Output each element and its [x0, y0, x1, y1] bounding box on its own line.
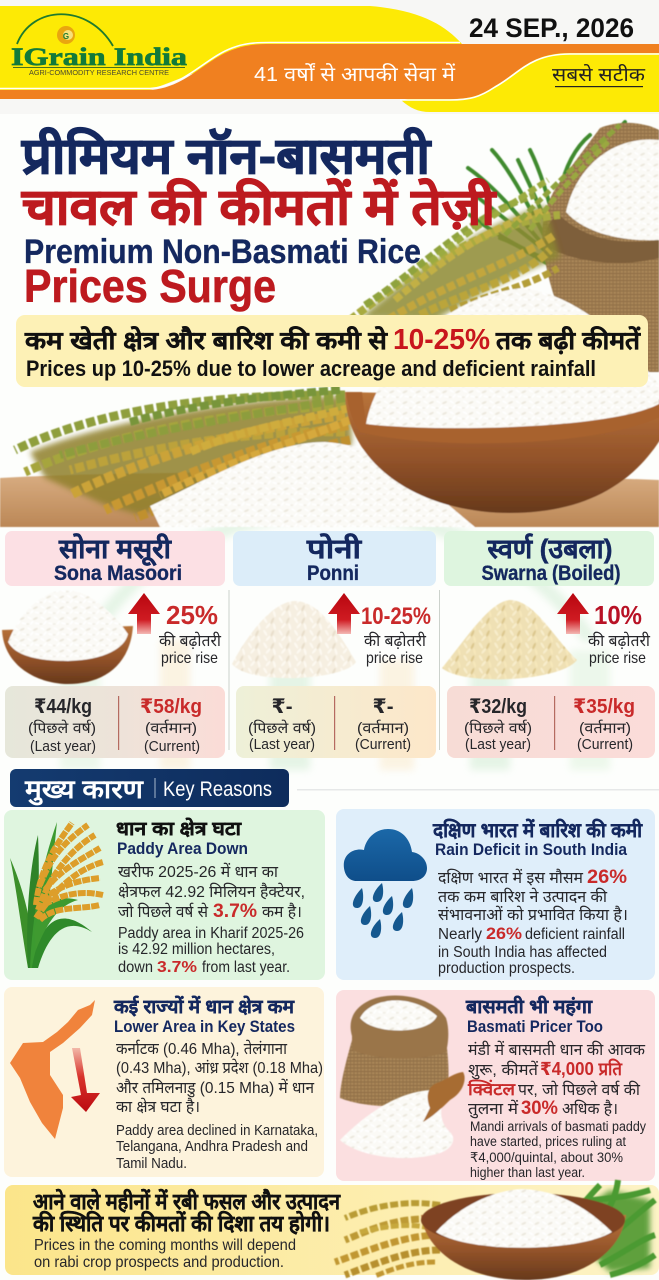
logo: IGrain India: AGRI-COMMODITY RESEARCH CENTRE — [29, 68, 169, 77]
text: कई राज्यों में धान क्षेत्र कम — [113, 995, 295, 1018]
heading: key reasons: Key Reasons — [163, 778, 272, 801]
date: 24 SEP., 2026 — [469, 13, 634, 43]
text: (0.43 Mha), आंध्र प्रदेश (0.18 Mha) — [116, 1058, 323, 1077]
sub-headline pill: तक बढ़ी कीमतें — [495, 326, 642, 355]
price rise: 10% — [594, 600, 642, 630]
panel: Swarna — [442, 531, 655, 758]
text: 3.7% — [157, 959, 197, 976]
sub-headline pill: Prices up 10-25% due to lower acreage and deficient rainfall — [26, 356, 596, 381]
text — [113, 995, 323, 1172]
price rise: की बढ़ोतरी — [159, 631, 222, 650]
text: खरीफ 2025-26 में धान का — [118, 862, 279, 881]
text: 30% — [521, 1098, 558, 1119]
text: 26% — [587, 867, 627, 888]
logo: IGrain India: IGrain India — [11, 44, 188, 71]
text: बासमती भी महंगा — [465, 995, 593, 1018]
text: Nearly — [438, 926, 482, 943]
text: Lower Area in Key States — [114, 1017, 295, 1036]
arrow up — [328, 593, 360, 634]
logo: IGrain India — [11, 14, 188, 77]
icon: rice sack — [340, 996, 449, 1106]
watermark background — [60, 512, 610, 770]
main title: चावल की कीमतों में तेज़ी — [21, 178, 497, 235]
green leaves — [468, 122, 625, 268]
text: 26% — [486, 924, 522, 943]
price rise: price rise — [366, 650, 423, 667]
icon: rice spill and scoop — [340, 1072, 465, 1158]
main title: प्रीमियम नॉन-बासमती — [21, 127, 432, 184]
text — [32, 1188, 341, 1271]
panel: Sona Masoori — [2, 531, 225, 758]
text: from last year. — [202, 959, 290, 976]
text: down — [118, 959, 153, 976]
price rise — [588, 600, 651, 667]
panel: basmati pricer too — [336, 990, 655, 1181]
main title: Prices Surge — [24, 260, 276, 312]
price box: (Current) — [144, 738, 200, 755]
price box: ₹44/kg — [34, 696, 92, 718]
panel: paddy area down — [4, 810, 325, 980]
panel: Ponni: पोनी — [306, 533, 362, 564]
yellow lower-right panel — [401, 52, 659, 112]
orange band — [0, 44, 659, 99]
logo: IGrain India: G — [63, 32, 69, 41]
text — [432, 818, 643, 977]
upper rice panicles — [350, 125, 620, 325]
text: का क्षेत्र घटा है। — [116, 1097, 200, 1116]
pile of ponni rice — [232, 601, 356, 678]
sub-headline pill: कम खेती क्षेत्र और बारिश की कमी से — [24, 326, 388, 355]
price box: (वर्तमान) — [579, 719, 631, 737]
price box: (पिछले वर्ष) — [248, 719, 316, 737]
price box: (पिछले वर्ष) — [464, 719, 532, 737]
panel: Sona Masoori: Sona Masoori — [54, 562, 182, 585]
price box: ₹32/kg — [469, 696, 527, 718]
arrow up — [128, 593, 160, 634]
price rise: price rise — [161, 650, 218, 667]
footer image: panicles, leaves and bowl — [335, 1180, 655, 1280]
bowl of white rice — [2, 590, 133, 684]
price rise — [159, 600, 222, 667]
text: deficient rainfall — [525, 926, 625, 943]
arrow up — [557, 593, 589, 634]
price box — [447, 686, 655, 758]
pile of swarna rice — [442, 600, 577, 679]
text: कम है। — [262, 902, 302, 921]
text — [116, 817, 305, 976]
price box: (वर्तमान) — [145, 719, 197, 737]
price rise: price rise — [589, 650, 646, 667]
text: Paddy area declined in Karnataka, — [116, 1122, 318, 1139]
burlap bag — [542, 123, 659, 372]
text: production prospects. — [438, 960, 575, 977]
icon: paddy plant — [10, 822, 103, 968]
sub-headline pill — [16, 315, 648, 387]
tagline: सबसे सटीक — [552, 63, 645, 86]
text — [465, 995, 646, 1180]
text: धान का क्षेत्र घटा — [116, 817, 242, 840]
icon: map of southern states — [10, 1000, 95, 1139]
price box: ₹35/kg — [573, 696, 635, 718]
hero photo — [0, 122, 659, 527]
text: Rain Deficit in South India — [435, 840, 627, 859]
table — [0, 472, 659, 527]
text: मंडी में बासमती धान की आवक — [468, 1040, 646, 1059]
price rise: की बढ़ोतरी — [364, 631, 427, 650]
price box: ₹- — [272, 696, 292, 718]
text: जो पिछले वर्ष से — [118, 902, 209, 921]
text: क्षेत्रफल 42.92 मिलियन हैक्टेयर, — [118, 882, 305, 901]
price box: (Last year) — [30, 738, 96, 755]
price rise: की बढ़ोतरी — [588, 631, 651, 650]
price rise: 10-25% — [361, 603, 431, 630]
text: Prices in the coming months will depend — [34, 1237, 296, 1254]
panel: Ponni — [232, 531, 436, 758]
text: कर्नाटक (0.46 Mha), तेलंगाना — [116, 1039, 288, 1058]
text: ₹4,000/quintal, about 30% — [470, 1150, 623, 1165]
panel: outlook footer — [5, 1180, 659, 1280]
text: is 42.92 million hectares, — [118, 941, 275, 958]
text: दक्षिण भारत में इस मौसम — [438, 868, 583, 887]
header banner — [0, 0, 659, 114]
text: Tamil Nadu. — [116, 1155, 187, 1172]
text: और तमिलनाडु (0.15 Mha) में धान — [116, 1078, 315, 1098]
text: ₹4,000 प्रति — [540, 1058, 623, 1079]
price box: (वर्तमान) — [357, 719, 409, 737]
wooden bowl — [345, 288, 659, 513]
text: शुरू, कीमतें — [468, 1060, 539, 1080]
panel: Swarna: स्वर्ण (उबला) — [487, 533, 612, 564]
price box — [5, 686, 225, 758]
text: Basmati Pricer Too — [467, 1017, 603, 1036]
panel: Sona Masoori: सोना मसूरी — [58, 533, 172, 567]
icon: rain cloud — [344, 829, 427, 938]
main title: Premium Non-Basmati Rice — [24, 233, 421, 271]
text: आने वाले महीनों में रबी फसल और उत्पादन — [33, 1188, 341, 1214]
lower rice panicles — [15, 390, 352, 518]
heading: key reasons — [10, 769, 289, 807]
price box: (Last year) — [249, 736, 315, 753]
price rise: 25% — [166, 600, 218, 630]
price rise — [361, 603, 431, 667]
text: in South India has affected — [438, 944, 607, 961]
text: क्विंटल — [467, 1079, 517, 1099]
hero panel — [0, 122, 659, 527]
sub-headline pill: 10-25% — [393, 324, 490, 356]
text: पर, जो पिछले वर्ष की — [518, 1080, 641, 1099]
text: Mandi arrivals of basmati paddy — [470, 1119, 646, 1134]
price box: (पिछले वर्ष) — [28, 719, 96, 737]
text: Paddy area in Kharif 2025-26 — [118, 925, 304, 942]
price box: ₹- — [372, 696, 394, 718]
rice pile — [150, 442, 475, 527]
text: तुलना में — [468, 1099, 518, 1119]
panel: Ponni: Ponni — [307, 562, 359, 585]
text: higher than last year. — [470, 1165, 585, 1180]
text: Telangana, Andhra Pradesh and — [116, 1138, 308, 1155]
text: तक कम बारिश ने उत्पादन की — [438, 887, 608, 906]
rice in bowl — [366, 288, 659, 430]
main title — [21, 127, 497, 312]
panel: rain deficit — [336, 809, 655, 980]
yellow upper panel — [0, 6, 462, 90]
price box: ₹58/kg — [140, 696, 202, 718]
text: have started, prices ruling at — [470, 1134, 626, 1149]
text: Paddy Area Down — [117, 839, 248, 858]
text: की स्थिति पर कीमतों की दिशा तय होगी। — [32, 1210, 330, 1236]
price box: (Current) — [355, 736, 411, 753]
text: संभावनाओं को प्रभावित किया है। — [438, 905, 628, 924]
text: अधिक है। — [562, 1099, 618, 1118]
price box: (Current) — [577, 736, 633, 753]
price box — [236, 686, 436, 758]
heading: key reasons: मुख्य कारण — [24, 774, 144, 806]
text: 3.7% — [213, 901, 257, 922]
arrow down — [71, 1048, 100, 1112]
slogan: 41 वर्षों से आपकी सेवा में — [254, 63, 456, 86]
text: on rabi crop prospects and production. — [34, 1254, 284, 1271]
price box: (Last year) — [465, 736, 531, 753]
panel: Swarna: Swarna (Boiled) — [482, 562, 620, 585]
panel: lower area in key states — [4, 987, 324, 1177]
text: दक्षिण भारत में बारिश की कमी — [432, 818, 643, 842]
